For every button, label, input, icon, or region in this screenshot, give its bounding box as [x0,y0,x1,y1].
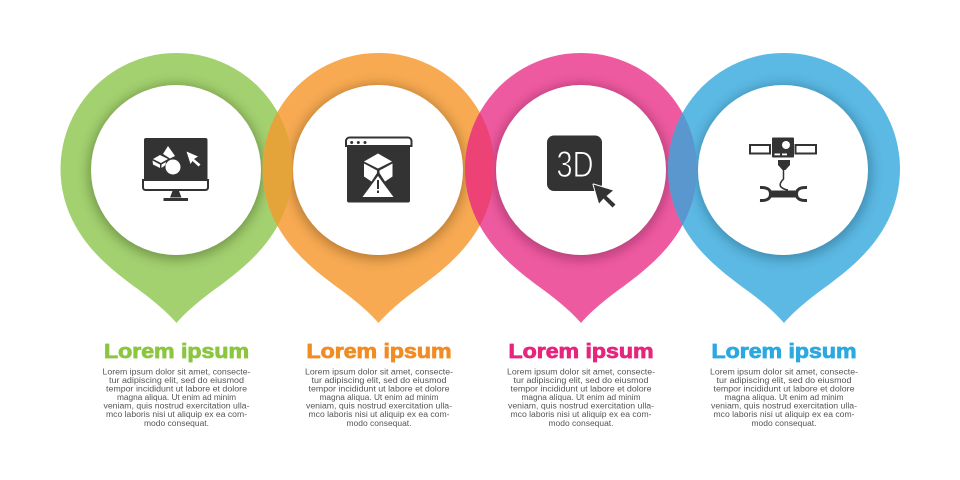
text block: step 3: veniam, quis nostrud exercitation ulla- [508,402,654,410]
text block: step 2 [305,368,453,428]
text block: step 1: mco laboris nisi ut aliquip ex ea com- [106,410,247,419]
white circle: step 4 [698,85,868,255]
text block: step 1: magna aliqua. Ut enim ad minim [117,393,236,402]
text block: step 3: modo consequat. [548,419,614,428]
text block: step 2: veniam, quis nostrud exercitation ulla- [306,402,452,410]
text block: step 1: Lorem ipsum dolor sit amet, consecte- [102,368,251,376]
heading: step 3: Lorem ipsum [508,341,654,363]
overlap: pink and blue [668,113,697,225]
heading: step 2: Lorem ipsum [306,341,452,363]
icon: monitor with 3D shapes and cursor [143,138,208,201]
white circle: step 2 [293,85,463,255]
text block: step 2: Lorem ipsum dolor sit amet, consecte- [305,368,453,376]
text block: step 2: mco laboris nisi ut aliquip ex ea com- [308,410,450,419]
text block: step 1: tempor incididunt ut labore et dolore [106,384,248,394]
pin: pink [465,53,697,323]
text block: step 4 [710,368,858,428]
text block: step 1: veniam, quis nostrud exercitation ulla- [104,402,250,410]
text block: step 1 [102,368,251,428]
text block: step 3 [507,368,655,428]
pin: blue [668,53,900,323]
text block: step 4: Lorem ipsum dolor sit amet, consecte- [710,368,858,376]
overlap: green and orange [262,112,292,226]
text block: step 2: tur adipiscing elit, sed do eiusmod [312,376,446,385]
heading: step 4: Lorem ipsum [712,341,856,363]
text block: step 4: tur adipiscing elit, sed do eiusmod [716,376,852,385]
white circle: step 1 [91,85,261,255]
text block: step 4: veniam, quis nostrud exercitation ulla- [711,402,857,410]
heading: step 1: Lorem ipsum [104,341,249,363]
text block: step 3: tempor incididunt ut labore et dolore [510,384,652,394]
icon: browser window with cube and warning [346,138,412,202]
icon: 3D button with cursor [547,136,616,208]
text block: step 2: tempor incididunt ut labore et dolore [308,384,450,394]
text block: step 4: magna aliqua. Ut enim ad minim [724,393,844,402]
text block: step 3: Lorem ipsum dolor sit amet, consecte- [507,368,655,376]
icon: 3D printer head with wrench [750,138,816,201]
icon: 3D button with cursor: 3D [556,144,594,185]
text block: step 4: tempor incididunt ut labore et dolore [714,384,855,394]
text block: step 1: modo consequat. [144,419,209,428]
text block: step 3: magna aliqua. Ut enim ad minim [522,393,641,402]
text block: step 1: tur adipiscing elit, sed do eiusmod [109,376,244,385]
text block: step 3: mco laboris nisi ut aliquip ex ea com- [510,410,652,419]
text block: step 4: mco laboris nisi ut aliquip ex ea com- [714,410,855,419]
text block: step 2: magna aliqua. Ut enim ad minim [320,393,439,402]
overlap: orange and pink [465,112,494,226]
pin: green [60,53,292,323]
text block: step 3: tur adipiscing elit, sed do eiusmod [514,376,648,385]
text block: step 4: modo consequat. [752,419,816,428]
text block: step 2: modo consequat. [346,419,412,428]
white circle: step 3 [496,85,666,255]
pin: orange [262,53,494,323]
